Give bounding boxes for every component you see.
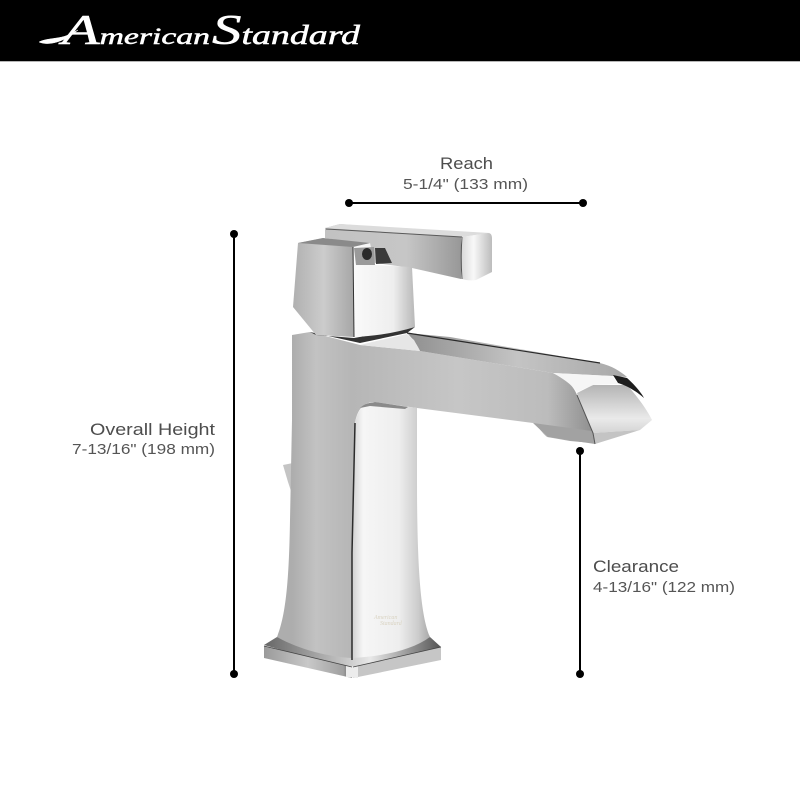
small brand mark on base: American: [373, 615, 397, 621]
label: clearance: Clearance: [593, 557, 679, 576]
small brand mark on base: [373, 615, 403, 627]
handle lever: [325, 224, 492, 280]
handle block: [293, 238, 415, 337]
faucet body right face: [352, 402, 430, 658]
logo: American Standard: [39, 8, 361, 54]
logo: American Standard: A merican: [58, 8, 210, 54]
collar under handle: [310, 327, 420, 351]
small brand mark on base: Standard: [380, 621, 403, 627]
spout tip underside and end: [533, 373, 652, 444]
shadow under body arch: [360, 402, 408, 409]
label: overall height: 7-13/16" (198 mm): [72, 441, 215, 458]
dimension: reach: [345, 199, 587, 207]
label: reach: 5-1/4" (133 mm): [403, 176, 528, 193]
dimension: clearance: [576, 447, 584, 678]
spout top surface: [407, 333, 627, 377]
logo: American Standard: S tandard: [212, 8, 361, 54]
header bar: [0, 0, 800, 62]
base plate: [264, 637, 441, 678]
label: reach: [403, 154, 528, 193]
faucet: [264, 224, 652, 678]
faucet body and spout front face: [277, 332, 593, 658]
pop-up drain lever: [283, 463, 293, 497]
label: overall height: Overall Height: [90, 420, 215, 439]
label: reach: Reach: [440, 154, 493, 173]
label: overall height: [72, 420, 215, 458]
label: clearance: [593, 557, 735, 596]
label: clearance: 4-13/16" (122 mm): [593, 579, 735, 596]
body centre edge: [352, 423, 355, 660]
dimension: overall height: [230, 230, 238, 678]
